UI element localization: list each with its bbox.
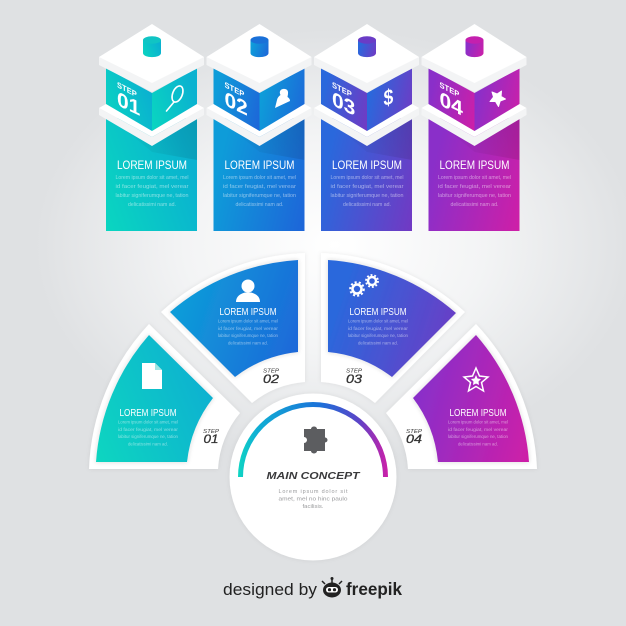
text block 04: id facer feugiat, mel verear	[438, 184, 511, 190]
step tag 01	[203, 429, 219, 446]
band 03	[314, 104, 419, 146]
step label 04: 04	[440, 87, 463, 121]
icon: star	[490, 91, 506, 106]
band 02	[206, 104, 312, 146]
white sector 01	[89, 324, 240, 469]
text: designed by: designed by	[223, 580, 318, 599]
text block 02: id facer feugiat, mel verear	[223, 184, 296, 190]
top plate 02	[206, 24, 312, 92]
text block s1: id facer feugiat, mel verear	[118, 427, 179, 432]
body panel 03	[321, 118, 412, 231]
icon: gears	[350, 275, 378, 296]
left face 04	[428, 68, 474, 131]
text block 03: delicatissimi nam ad.	[343, 202, 391, 208]
step tag 03: 03	[346, 372, 362, 386]
shadow under band 02	[214, 118, 304, 160]
heading 02: LOREM IPSUM	[224, 158, 294, 172]
white sector 04	[386, 324, 537, 469]
right face 01	[152, 68, 197, 131]
step label 01: 01	[117, 87, 140, 121]
text block 01: Lorem ipsum dolor sit amet, mel	[116, 175, 188, 181]
icon: magnifier	[166, 84, 185, 111]
text block 03	[330, 175, 404, 208]
step label 01: STEP	[117, 79, 137, 100]
text block s2: id facer feugiat, mel verear	[218, 326, 279, 331]
panel: step 02 column	[206, 24, 312, 231]
right face 03	[367, 68, 412, 131]
heading s2: LOREM IPSUM	[220, 307, 276, 318]
panel: step 01 column	[99, 24, 204, 231]
text block: main concept	[278, 489, 348, 510]
text block 02	[223, 175, 296, 208]
left face 01	[106, 68, 152, 131]
text block 03: Lorem ipsum dolor sit amet, mel	[330, 175, 404, 181]
cylinder 04	[466, 36, 484, 57]
text block s4: delicatissimi nam ad.	[458, 442, 498, 446]
white circle	[230, 394, 396, 560]
text block 02: labitur signiferumque ne, tation	[223, 193, 296, 199]
text block 01: delicatissimi nam ad.	[128, 202, 176, 208]
top plate 03	[314, 24, 419, 92]
step tag 02	[263, 368, 279, 386]
right face 04	[474, 68, 520, 131]
text block s3: delicatissimi nam ad.	[358, 340, 398, 346]
text block s1: labitur signiferumque ne, tation	[118, 434, 179, 439]
top plate 01	[99, 24, 204, 92]
text block 02: delicatissimi nam ad.	[236, 202, 284, 208]
text block s2: Lorem ipsum dolor sit amet, mel	[218, 318, 278, 324]
footer: designed by freepik	[223, 577, 402, 599]
step tag 04	[406, 429, 422, 446]
icon: document	[142, 363, 162, 389]
text block 01: id facer feugiat, mel verear	[116, 184, 189, 190]
left face 03	[321, 68, 367, 131]
colored sector 01	[96, 335, 213, 462]
heading 04: LOREM IPSUM	[440, 158, 510, 172]
heading 01: LOREM IPSUM	[117, 158, 187, 172]
band 04	[422, 104, 526, 146]
colored sector 04	[413, 335, 529, 462]
heading s3: LOREM IPSUM	[350, 307, 406, 318]
text block s4: id facer feugiat, mel verear	[448, 427, 509, 432]
icon: person	[275, 89, 290, 108]
icon: puzzle piece	[304, 426, 328, 454]
step tag 03	[346, 368, 362, 386]
step label 04: STEP	[440, 79, 460, 100]
text block 02: Lorem ipsum dolor sit amet, mel	[223, 175, 296, 181]
cylinder 03	[358, 36, 376, 57]
step tag 01: 01	[204, 432, 218, 446]
text block s3: id facer feugiat, mel verear	[348, 326, 409, 331]
colored sector 02	[170, 260, 298, 377]
white sector 03	[321, 253, 465, 403]
text block s3: Lorem ipsum dolor sit amet, mel	[348, 318, 408, 324]
icon: user	[236, 280, 260, 302]
body panel 01	[106, 118, 197, 231]
panel: semicircle step 02	[161, 253, 305, 403]
left face 02	[214, 68, 260, 131]
text block: main concept: Lorem ipsum dolor sit	[278, 489, 348, 495]
step label 03: STEP	[332, 79, 352, 100]
text block s1: Lorem ipsum dolor sit amet, mel	[118, 420, 178, 424]
step label 03: 03	[332, 87, 355, 121]
text block 03: labitur signiferumque ne, tation	[330, 193, 404, 199]
step label 02: STEP	[224, 79, 245, 100]
shadow under band 01	[106, 118, 197, 160]
text block 04: labitur signiferumque ne, tation	[438, 193, 511, 199]
top plate 04	[422, 24, 526, 92]
text block s4: labitur signiferumque ne, tation	[448, 434, 509, 439]
panel: step 03 column	[314, 24, 419, 231]
text block s4	[448, 420, 509, 446]
white sector 02	[161, 253, 305, 403]
heading 03: LOREM IPSUM	[332, 158, 402, 172]
panel: semicircle step 01	[89, 324, 240, 469]
text block s4: Lorem ipsum dolor sit amet, mel	[448, 420, 508, 424]
gradient arc	[240, 405, 386, 477]
panel: step 04 column	[422, 24, 526, 231]
icon: star outline	[464, 368, 488, 391]
icon: dollar: $	[384, 85, 393, 111]
shadow under band 03	[321, 118, 412, 160]
text block s2: labitur signiferumque ne, tation	[218, 333, 279, 338]
icon: freepik mascot	[322, 577, 342, 598]
text block 04: Lorem ipsum dolor sit amet, mel	[438, 175, 511, 181]
panel: semicircle step 04	[386, 324, 537, 469]
step tag 04: 04	[406, 432, 422, 446]
colored sector 03	[328, 260, 456, 377]
step tag 04: STEP	[406, 429, 422, 435]
text block s1	[118, 420, 179, 446]
text block s1: delicatissimi nam ad.	[128, 442, 168, 446]
step tag 01: STEP	[203, 429, 219, 435]
body panel 04	[428, 118, 520, 231]
cylinder 02	[250, 36, 268, 57]
text: freepik: freepik	[346, 579, 402, 599]
text block s3: labitur signiferumque ne, tation	[348, 333, 409, 338]
heading s4: LOREM IPSUM	[450, 408, 506, 419]
step tag 03: STEP	[346, 368, 362, 374]
band 01	[99, 104, 204, 146]
body panel 02	[214, 118, 304, 231]
text block s2: delicatissimi nam ad.	[228, 340, 268, 346]
text block: main concept: facilisis.	[302, 504, 324, 510]
text block: main concept: amet, mel no hinc paulo	[278, 496, 348, 502]
right face 02	[260, 68, 304, 131]
shadow under band 04	[428, 118, 520, 160]
text block s2	[218, 318, 279, 346]
heading s1: LOREM IPSUM	[120, 408, 176, 419]
cylinder 01	[143, 36, 161, 57]
heading: main concept: MAIN CONCEPT	[266, 470, 361, 482]
text block 04: delicatissimi nam ad.	[450, 202, 498, 208]
panel: semicircle step 03	[321, 253, 465, 403]
step tag 02: STEP	[263, 368, 279, 374]
text block s3	[348, 318, 409, 346]
text block 03: id facer feugiat, mel verear	[330, 184, 404, 190]
panel: main concept circle	[230, 394, 396, 560]
text block 04	[438, 175, 511, 208]
text block 01: labitur signiferumque ne, tation	[116, 193, 189, 199]
text block 01	[116, 175, 189, 208]
step tag 02: 02	[263, 372, 279, 386]
step label 02: 02	[224, 87, 248, 121]
